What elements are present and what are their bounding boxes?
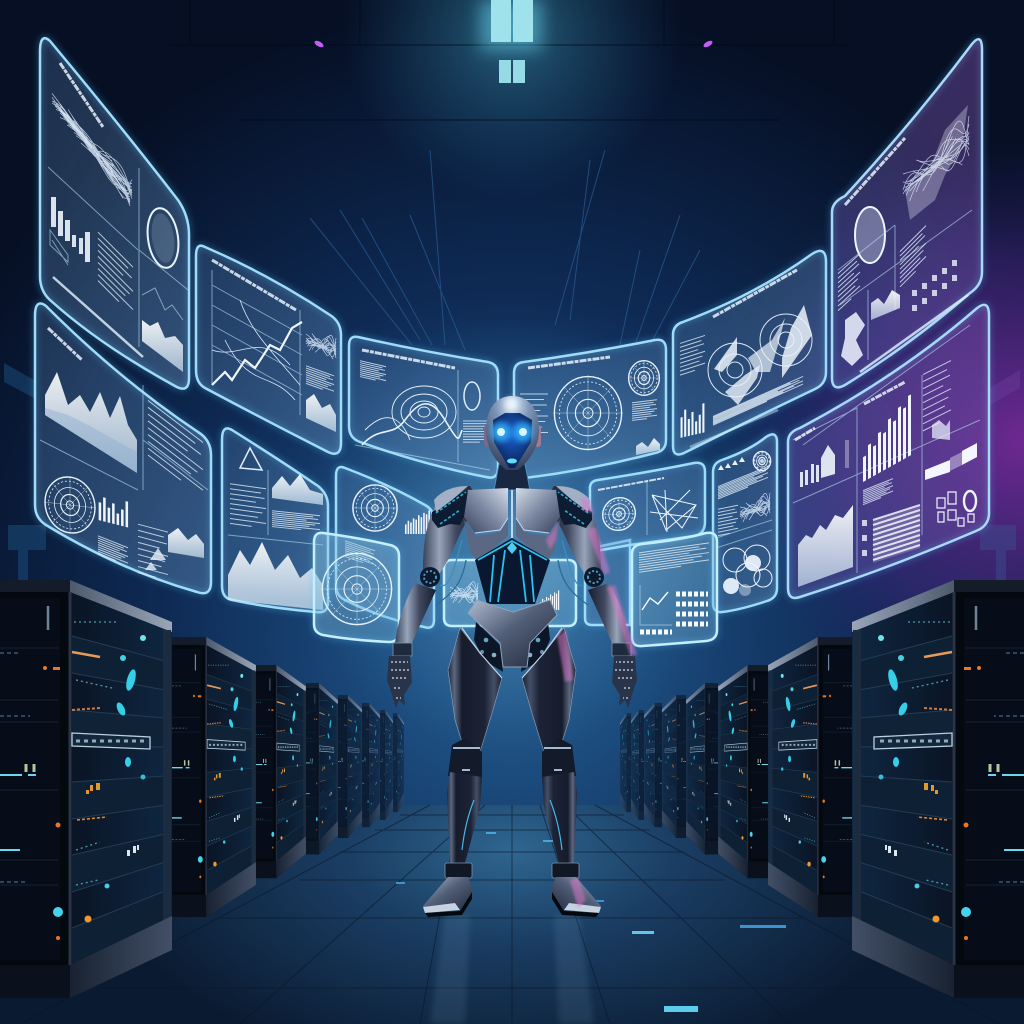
ceiling lights [313,0,714,83]
panel: contour map [349,337,498,478]
panel: central radial panel behind robot [336,467,434,628]
panel: foreground right grid [632,533,717,646]
panel: radial scanner [514,340,666,478]
server racks: left row [0,580,404,998]
panel: foreground left radial [314,533,399,642]
floor [0,805,1024,1024]
centre glow behind robot [240,320,784,750]
panel: glowing panels behind robot waist [444,540,630,626]
panel: top-left curved dashboard [40,38,189,389]
wall bracket blocks [4,363,1020,580]
robot: pelvis armour [468,600,557,667]
panel: donut charts [673,251,826,454]
panel: line chart [196,246,341,454]
robot: pink rim lighting [530,412,637,908]
panel: tall narrow dashboard [713,434,777,612]
server racks: right row [620,580,1024,998]
robot: neck [494,464,530,490]
panel: right purple dashboard [788,305,989,598]
panel: top-right curved dashboard [832,39,982,387]
robot [387,396,637,917]
robot: head [484,396,541,470]
panel: network diagram upper right [590,463,705,552]
robot: waist core [475,490,550,604]
panel: left area chart dashboard [35,304,211,593]
panel: mountain chart [222,428,328,612]
